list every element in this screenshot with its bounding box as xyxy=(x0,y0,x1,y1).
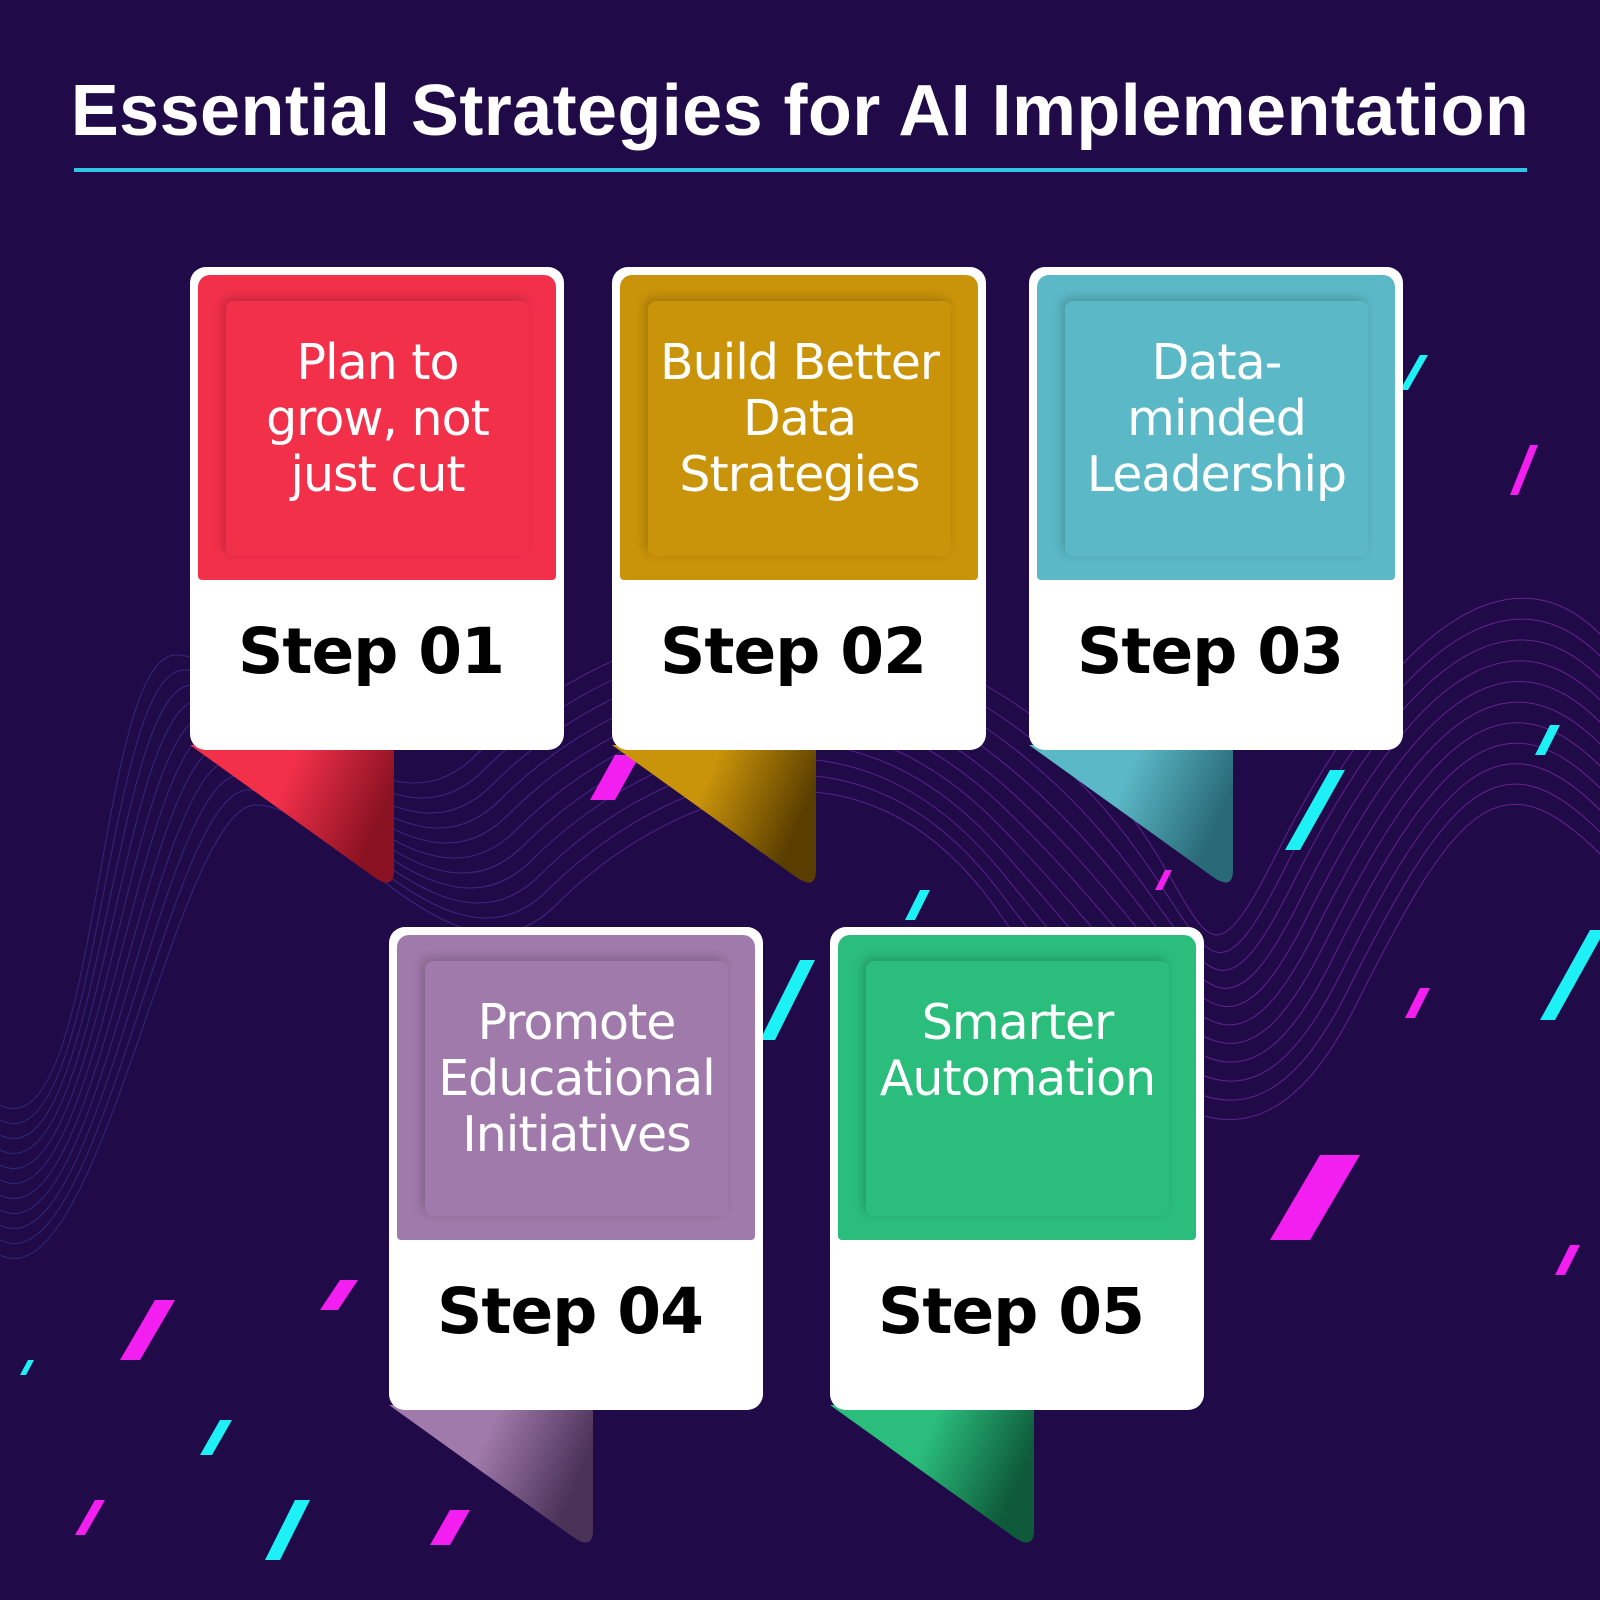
card: step 03 xyxy=(1029,267,1403,883)
card: step 03: Leadership xyxy=(1087,446,1346,503)
card: step 03: Data- xyxy=(1152,334,1281,391)
card: step 05: Automation xyxy=(880,1050,1155,1107)
card: step 04: Initiatives xyxy=(462,1106,691,1163)
card: step 04: Step 04 xyxy=(437,1275,703,1348)
tail xyxy=(190,745,394,883)
card: step 01: Plan to xyxy=(296,334,458,391)
card: step 03: minded xyxy=(1127,390,1306,447)
card: step 05: Smarter xyxy=(922,994,1113,1051)
card: step 01 xyxy=(190,267,564,883)
card: step 01: grow, not xyxy=(266,390,489,447)
card: step 02: Build Better xyxy=(660,334,939,391)
card: step 01: Step 01 xyxy=(238,615,504,688)
card: step 04 xyxy=(389,927,763,1543)
card: step 02: Data xyxy=(743,390,856,447)
card: step 03: Step 03 xyxy=(1077,615,1343,688)
card: step 02: Strategies xyxy=(679,446,920,503)
card: step 01: just cut xyxy=(290,446,465,503)
card: step 04: Educational xyxy=(438,1050,715,1107)
card: step 02 xyxy=(612,267,986,883)
card: step 05 xyxy=(830,927,1204,1543)
card: step 02: Step 02 xyxy=(660,615,926,688)
card: step 05: Step 05 xyxy=(878,1275,1144,1348)
card: step 04: Promote xyxy=(478,994,675,1051)
title: Essential Strategies for AI Implementation xyxy=(71,71,1529,151)
